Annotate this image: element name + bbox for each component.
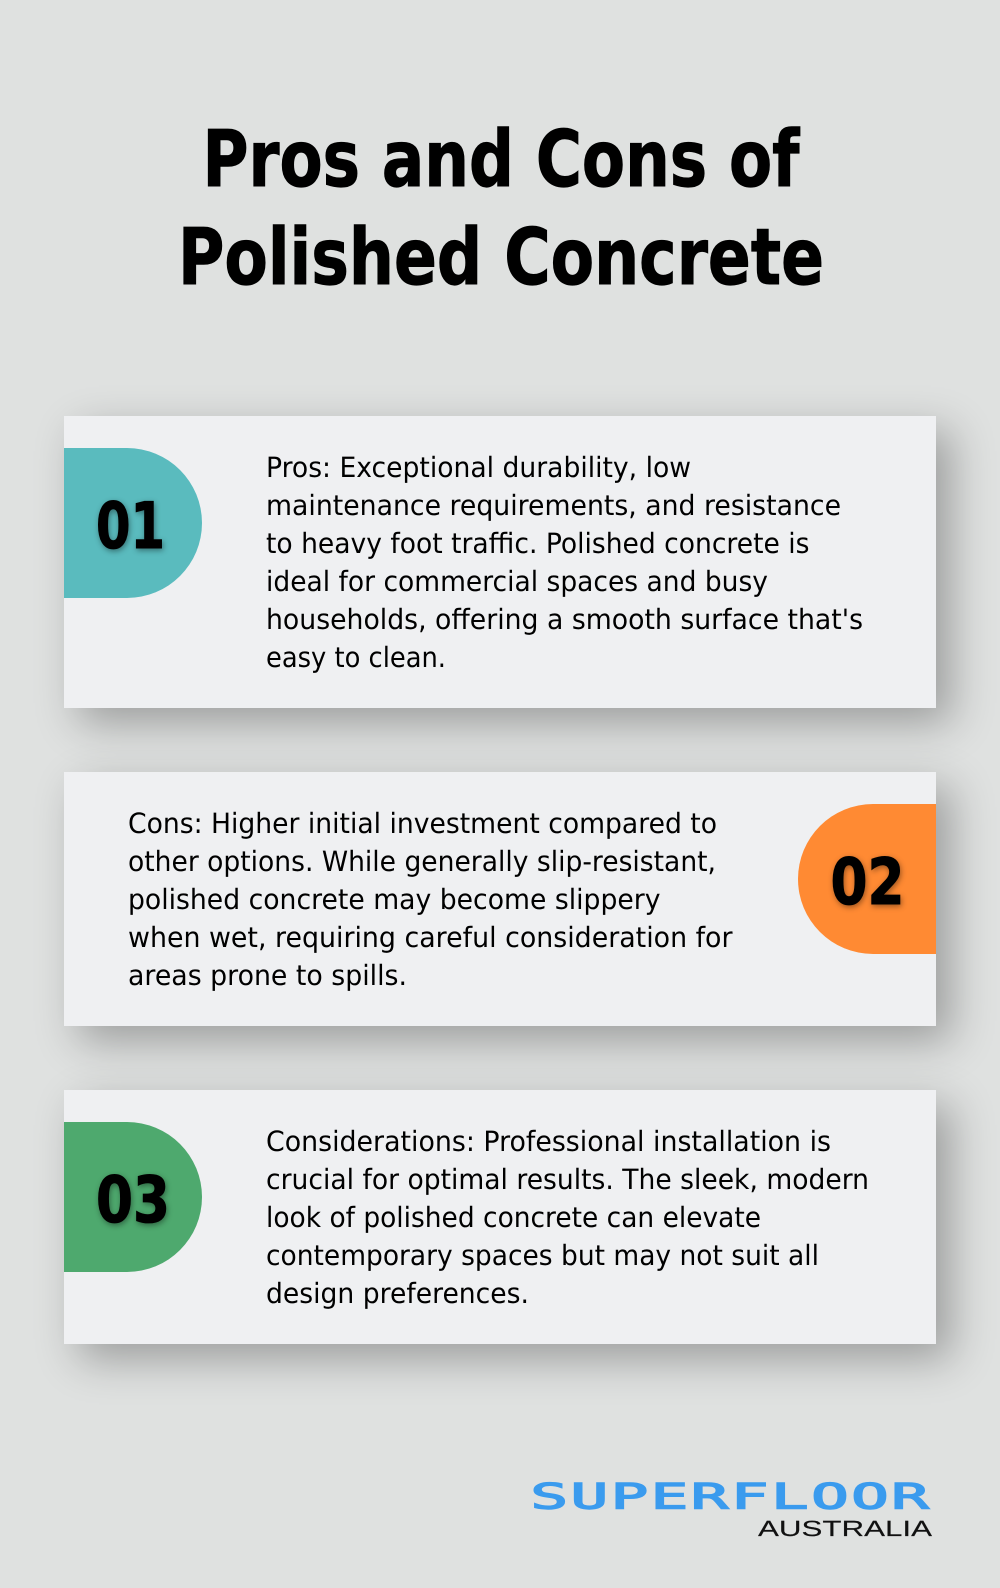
- badge: 01: 01: [96, 490, 165, 564]
- text: cons description: when wet, requiring careful consideration for: [128, 921, 733, 954]
- text: considerations description: design preferences.: [266, 1277, 528, 1310]
- text: pros description: ideal for commercial spaces and busy: [266, 565, 768, 598]
- panel: considerations: [64, 1090, 936, 1344]
- badge: 02: [798, 804, 936, 954]
- title: Pros and Cons of: [202, 115, 800, 205]
- text: pros description: Pros: Exceptional durability, low: [266, 451, 690, 484]
- text: cons description: polished concrete may become slippery: [128, 883, 660, 916]
- panel: pros: [64, 416, 936, 708]
- text: pros description: maintenance requirements, and resistance: [266, 489, 840, 522]
- badge: 02: 02: [830, 846, 904, 920]
- badge: 01: [64, 448, 202, 598]
- logo: Superfloor Australia: SUPERFLOOR: [530, 1478, 932, 1518]
- text: considerations description: [266, 1125, 868, 1310]
- text: cons description: [128, 807, 733, 992]
- text: pros description: [266, 451, 862, 674]
- title: Polished Concrete: [178, 213, 824, 303]
- text: considerations description: Considerations: Professional installation is: [266, 1125, 830, 1158]
- badge: 03: 03: [96, 1164, 170, 1238]
- text: cons description: other options. While generally slip-resistant,: [128, 845, 716, 878]
- text: considerations description: look of polished concrete can elevate: [266, 1201, 760, 1234]
- title: [178, 115, 824, 303]
- logo: Superfloor Australia: [530, 1478, 932, 1541]
- text: pros description: easy to clean.: [266, 641, 446, 674]
- badge: 03: [64, 1122, 202, 1272]
- panel: cons: [64, 772, 936, 1026]
- text: cons description: Cons: Higher initial investment compared to: [128, 807, 717, 840]
- text: cons description: areas prone to spills.: [128, 959, 407, 992]
- logo: Superfloor Australia: AUSTRALIA: [758, 1516, 932, 1541]
- text: considerations description: crucial for optimal results. The sleek, modern: [266, 1163, 868, 1196]
- text: considerations description: contemporary spaces but may not suit all: [266, 1239, 818, 1272]
- text: pros description: to heavy foot traffic. Polished concrete is: [266, 527, 809, 560]
- text: pros description: households, offering a smooth surface that's: [266, 603, 862, 636]
